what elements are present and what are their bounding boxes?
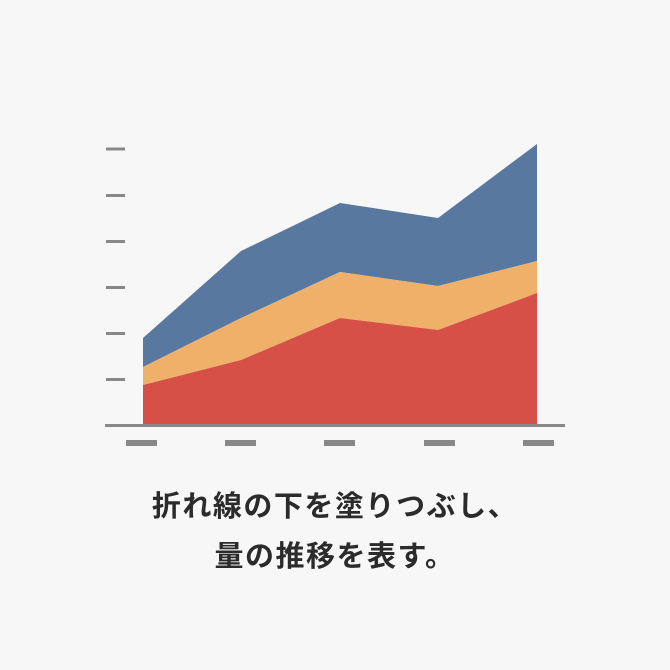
y axis ticks <box>106 148 125 381</box>
area: red series <box>143 293 537 425</box>
x axis baseline <box>105 424 565 427</box>
caption line 2: 量の推移を表す。 <box>214 541 456 573</box>
area: blue series <box>143 144 537 367</box>
caption line 1: 折れ線の下を塗りつぶし、 <box>152 491 518 523</box>
x axis ticks <box>126 440 554 446</box>
area: orange series <box>143 261 537 385</box>
